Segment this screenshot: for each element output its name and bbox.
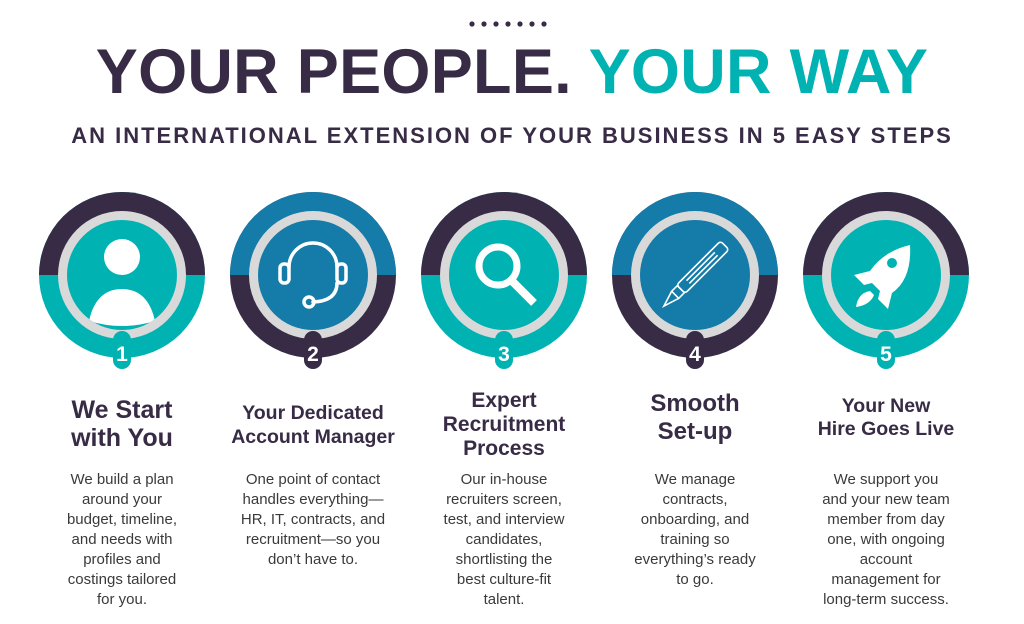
body 2: recruitment—so you [246,531,380,548]
body 4: training so [660,531,730,548]
icon circle 3: magnifier [421,192,587,369]
step circles [39,192,969,369]
decorative dots [469,21,547,27]
body 4 [634,471,756,588]
body 1: We build a plan [70,471,174,488]
body 2: handles everything— [243,491,383,508]
body 3: Our in-house [461,471,547,488]
heading 2: Account Manager [231,426,395,448]
subtitle: AN INTERNATIONAL EXTENSION OF YOUR BUSINESS IN 5 EASY STEPS [71,123,953,148]
heading 4: Smooth [650,390,740,417]
body 1: costings tailored [68,571,176,588]
body 2: One point of contact [246,471,380,488]
body 5: account [860,551,912,568]
body 4: to go. [676,571,714,588]
body 5: We support you [834,471,938,488]
heading 2 [231,402,395,448]
icon circle 1: person [39,192,205,369]
body 2: don’t have to. [268,551,358,568]
body 5: one, with ongoing [827,531,945,548]
body 1: around your [82,491,162,508]
body 2 [241,471,385,568]
heading 1: with You [71,424,173,452]
body 1 [67,471,177,608]
body 3: shortlisting the [456,551,552,568]
body 5 [822,471,950,608]
icon circle 5: rocket: 5 [880,343,892,366]
heading 5 [818,395,954,440]
body 5: long-term success. [823,591,949,608]
body 1: profiles and [83,551,161,568]
heading 5: Your New [842,395,930,417]
body 3 [444,471,564,608]
body 4: onboarding, and [641,511,749,528]
heading 4 [650,390,740,445]
heading 3 [443,389,565,460]
heading 1 [71,396,173,452]
heading 3: Process [463,437,545,460]
heading 5: Hire Goes Live [818,418,954,440]
icon circle 4: pen: 4 [689,343,701,366]
body 5: and your new team [822,491,950,508]
icon circle 3: magnifier: 3 [498,343,510,366]
body 3: candidates, [466,531,542,548]
icon circle 1: person: 1 [116,343,128,366]
body 1: for you. [97,591,147,608]
body 3: test, and interview [444,511,564,528]
title: YOUR PEOPLE. YOUR WAY [96,37,928,107]
body 4: We manage [655,471,735,488]
body 5: member from day [827,511,945,528]
body 3: recruiters screen, [446,491,562,508]
icon circle 2: headset [230,192,396,369]
icon circle 5: rocket [803,192,969,369]
body 2: HR, IT, contracts, and [241,511,385,528]
icon circle 2: headset: 2 [307,343,319,366]
heading 1: We Start [72,396,172,424]
body 4: everything’s ready [634,551,756,568]
body 1: and needs with [72,531,172,548]
body 3: best culture-fit [457,571,551,588]
heading 3: Expert [471,389,537,412]
heading 4: Set-up [658,418,732,445]
heading 3: Recruitment [443,413,565,436]
body 1: budget, timeline, [67,511,177,528]
body 5: management for [831,571,941,588]
heading 2: Your Dedicated [242,402,384,424]
body 3: talent. [484,591,524,608]
icon circle 4: pen [612,192,778,369]
body 4: contracts, [662,491,728,508]
